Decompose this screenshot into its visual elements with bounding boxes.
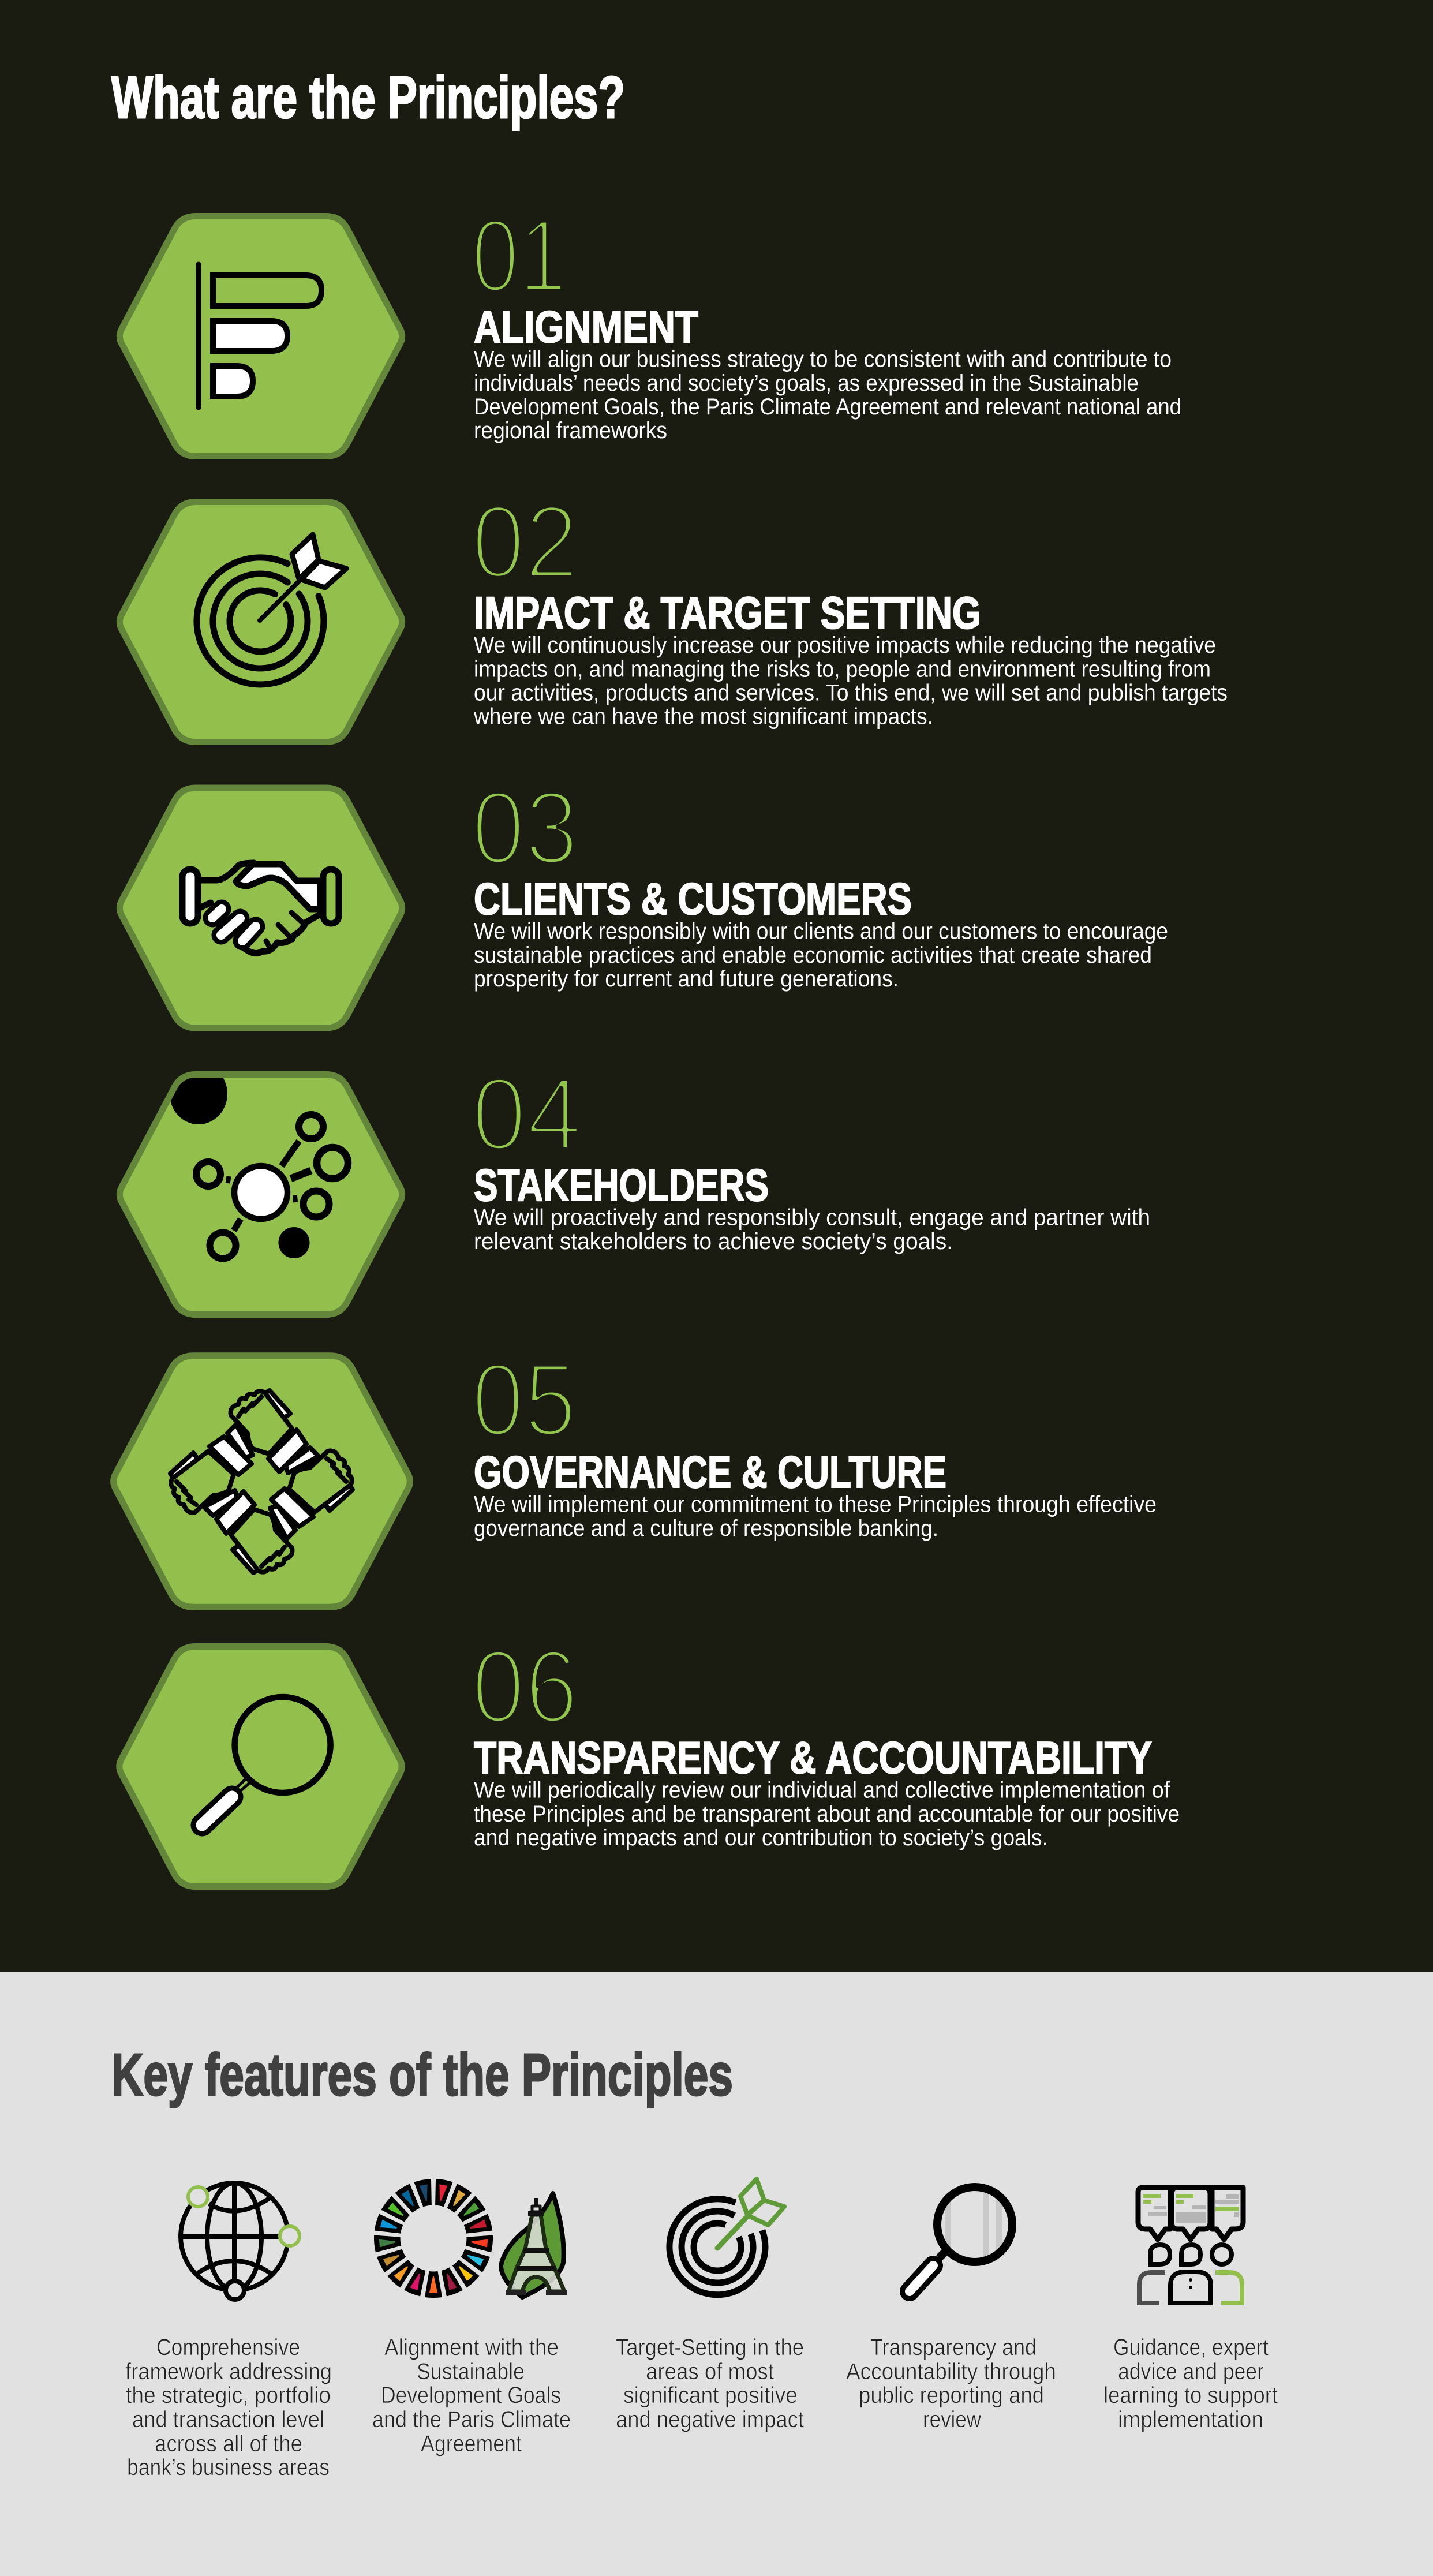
caption: comprehensive framework: [125, 2335, 332, 2480]
number 03: 03: [472, 770, 578, 886]
caption: target setting: [616, 2335, 804, 2432]
heading: stakeholders: STAKEHOLDERS: [474, 1160, 769, 1210]
feature 5: guidance and peer learning: [1103, 2188, 1278, 2432]
caption: sustainable development goals: [372, 2335, 571, 2457]
text block: alignment: Development Goals, the Paris Climate Agreement and relevant national and: [474, 394, 1181, 420]
icon: target with green dart: [669, 2179, 784, 2295]
icon: alignment hexagon: [119, 216, 402, 456]
caption: transparency and accountability: [846, 2335, 1056, 2432]
icon: SDG wheel: [373, 2178, 493, 2298]
icon: network hexagon: [119, 1063, 402, 1315]
caption: comprehensive framework: the strategic, portfolio: [126, 2383, 331, 2408]
number 05: 05: [472, 1342, 577, 1458]
panel: principles background: [0, 0, 1433, 1972]
principle 04: stakeholders: [119, 1056, 1150, 1315]
feature 2: sustainable development goals: [372, 2178, 571, 2457]
principle 05: governance and culture: [114, 1342, 1157, 1607]
panel: key features background: [0, 1972, 1433, 2576]
principle 03: clients and customers: [119, 770, 1168, 1028]
text block: governance and culture: governance and a culture of responsible banking.: [474, 1516, 938, 1541]
caption: transparency and accountability: review: [923, 2407, 981, 2432]
icon: globe: [181, 2183, 300, 2300]
text block: stakeholders: We will proactively and responsibly consult, engage and partner with: [474, 1205, 1150, 1231]
text block: stakeholders: [474, 1205, 1150, 1254]
heading: key features: Key features of the Principles: [111, 2042, 733, 2108]
caption: guidance and peer learning: Guidance, expert: [1113, 2335, 1269, 2360]
heading: governance and culture: GOVERNANCE & CULTURE: [474, 1446, 946, 1497]
caption: comprehensive framework: framework addressing: [125, 2359, 332, 2384]
text block: alignment: [474, 346, 1181, 443]
heading: clients and customers: CLIENTS & CUSTOMERS: [474, 873, 912, 924]
text block: clients and customers: [474, 919, 1168, 992]
text block: impact and target setting: [473, 633, 1228, 730]
caption: guidance and peer learning: learning to support: [1103, 2383, 1278, 2408]
icon: linked hands hexagon: [114, 1356, 410, 1607]
number 01: 01: [472, 198, 567, 314]
icon: people with speech bubbles: [1138, 2188, 1243, 2303]
caption: guidance and peer learning: implementation: [1118, 2407, 1263, 2432]
number 04: 04: [472, 1056, 582, 1172]
icon: target hexagon: [119, 502, 402, 742]
principle 02: impact and target setting: [119, 484, 1228, 742]
caption: target setting: significant positive: [623, 2383, 798, 2408]
caption: sustainable development goals: and the Paris Climate: [372, 2407, 571, 2432]
icon: handshake hexagon: [119, 788, 402, 1028]
text block: transparency and accountability: We will periodically review our individual and collective implementation of: [474, 1778, 1170, 1803]
caption: transparency and accountability: public reporting and: [859, 2383, 1044, 2408]
text block: alignment: individuals’ needs and society’s goals, as expressed in the Sustainable: [474, 371, 1139, 396]
text block: clients and customers: prosperity for current and future generations.: [474, 966, 899, 992]
icon: magnifier: [910, 2182, 1012, 2291]
caption: target setting: Target-Setting in the: [616, 2335, 804, 2360]
caption: target setting: and negative impact: [616, 2407, 804, 2432]
caption: guidance and peer learning: [1103, 2335, 1278, 2432]
text block: transparency and accountability: [474, 1778, 1180, 1850]
caption: comprehensive framework: bank’s business areas: [127, 2455, 330, 2480]
heading: alignment: ALIGNMENT: [474, 301, 698, 352]
text block: clients and customers: sustainable practices and enable economic activities that create shared: [474, 943, 1152, 968]
number 06: 06: [472, 1629, 578, 1745]
caption: sustainable development goals: Development Goals: [381, 2383, 561, 2408]
caption: comprehensive framework: and transaction level: [132, 2407, 324, 2432]
text block: alignment: regional frameworks: [474, 418, 667, 443]
text block: governance and culture: [474, 1491, 1157, 1541]
icon: Eiffel tower and leaf: [501, 2193, 567, 2297]
text block: governance and culture: We will implement our commitment to these Principles through effective: [474, 1491, 1157, 1517]
caption: transparency and accountability: Accountability through: [846, 2359, 1056, 2384]
caption: guidance and peer learning: advice and peer: [1118, 2359, 1264, 2384]
caption: comprehensive framework: across all of the: [155, 2431, 302, 2457]
text block: impact and target setting: our activities, products and services. To this end, we will set and publish targets: [474, 680, 1228, 705]
caption: comprehensive framework: Comprehensive: [156, 2335, 300, 2360]
caption: target setting: areas of most: [646, 2359, 774, 2384]
text block: impact and target setting: We will continuously increase our positive impacts while reducing the negative: [474, 633, 1216, 658]
text block: impact and target setting: where we can have the most significant impacts.: [473, 704, 933, 730]
caption: sustainable development goals: Alignment with the: [384, 2335, 559, 2360]
icon: magnifier hexagon: [119, 1646, 402, 1886]
text block: alignment: We will align our business strategy to be consistent with and contribute to: [474, 346, 1172, 372]
caption: transparency and accountability: Transparency and: [870, 2335, 1037, 2360]
principle 01: alignment: [119, 198, 1181, 456]
caption: sustainable development goals: Sustainable: [417, 2359, 525, 2384]
text block: transparency and accountability: these Principles and be transparent about and accountable for our positive: [474, 1801, 1180, 1827]
heading: impact and target setting: IMPACT & TARGET SETTING: [474, 588, 981, 638]
feature 3: target setting: [616, 2179, 804, 2432]
caption: sustainable development goals: Agreement: [421, 2431, 522, 2457]
text block: impact and target setting: impacts on, and managing the risks to, people and environment resulting from: [474, 657, 1211, 682]
feature 1: comprehensive framework: [125, 2183, 332, 2480]
feature 4: transparency and accountability: [846, 2182, 1056, 2432]
text block: clients and customers: We will work responsibly with our clients and our customers to encourage: [474, 919, 1168, 944]
title: What are the Principles?: [111, 64, 625, 130]
number 02: 02: [472, 484, 578, 600]
heading: transparency and accountability: TRANSPARENCY & ACCOUNTABILITY: [474, 1732, 1152, 1783]
principle 06: transparency and accountability: [119, 1629, 1180, 1886]
text block: stakeholders: relevant stakeholders to achieve society’s goals.: [474, 1229, 953, 1254]
text block: transparency and accountability: and negative impacts and our contribution to society’s goals.: [474, 1825, 1048, 1850]
